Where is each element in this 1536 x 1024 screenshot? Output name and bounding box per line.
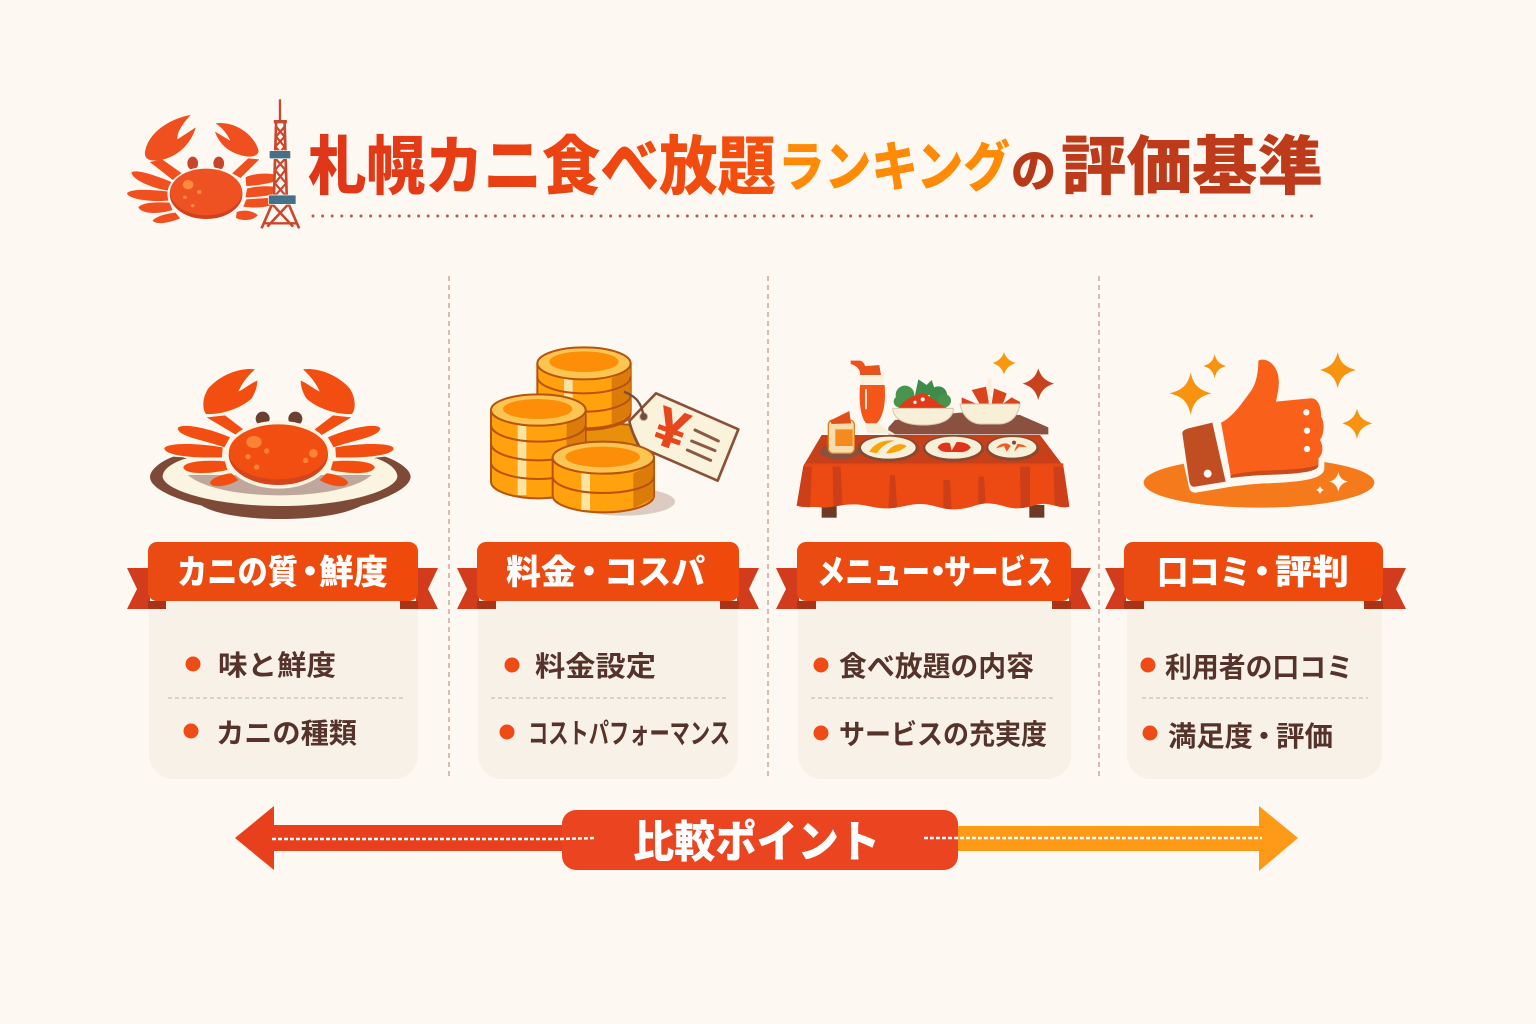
icon: coin stacks with price tag [491, 347, 738, 516]
comparison arrow [235, 806, 1298, 871]
ribbon banner: 評判 [1275, 554, 1349, 592]
list items: 評価 [1276, 721, 1333, 752]
ribbon banner [127, 542, 438, 609]
ribbon banner: ・ [572, 554, 606, 592]
list items: コストパフォーマンス [528, 718, 730, 749]
list items [1140, 652, 1368, 752]
ribbon banner: サービス [944, 553, 1053, 592]
header icon: crab [127, 115, 275, 223]
sauce jar [820, 411, 860, 459]
list items [168, 650, 404, 749]
ribbon banner: 口コミ [1157, 554, 1251, 592]
salad bowl [893, 379, 953, 425]
panel: カニの質・鮮度 [127, 542, 438, 779]
back coin stack [537, 347, 638, 468]
title: の [1011, 145, 1056, 197]
header icon: Sapporo TV tower [262, 99, 299, 228]
panel: メニュー・サービス [776, 542, 1091, 779]
list items [491, 651, 730, 749]
list items: 利用者の口コミ [1165, 652, 1353, 683]
panel: 口コミ・評判 [1105, 542, 1406, 779]
title [308, 131, 1323, 203]
ribbon banner: 鮮度 [319, 554, 388, 592]
price tag [624, 392, 738, 481]
icon: thumbs up [1144, 352, 1374, 508]
ribbon banner: メニュー [817, 554, 930, 592]
food shelf [888, 413, 1048, 434]
front coin stack [553, 442, 654, 512]
list items: カニの種類 [216, 718, 357, 749]
ribbon banner: ・ [921, 554, 955, 592]
list items [811, 651, 1054, 750]
ribbon banner: ・ [293, 554, 327, 592]
icon: crab on plate [150, 369, 411, 519]
price tag: ¥ [647, 394, 697, 463]
title: 評価基準 [1061, 131, 1323, 203]
title: ランキング [778, 137, 1010, 198]
title: 札幌カニ食べ放題 [308, 131, 776, 203]
sparkles [993, 352, 1016, 374]
drink glass [851, 361, 895, 434]
ribbon banner [457, 542, 759, 609]
ribbon banner [1105, 542, 1406, 609]
list items: 味と鮮度 [218, 650, 336, 681]
ribbon banner [776, 542, 1091, 609]
panel: 料金・コスパ [457, 542, 759, 779]
list items: 料金設定 [535, 651, 656, 682]
ribbon banner: ・ [1245, 554, 1279, 592]
ribbon banner: カニの質 [177, 554, 298, 592]
comparison arrow: 比較ポイント [633, 817, 880, 867]
list items: サービスの充実度 [839, 719, 1047, 750]
seafood bowl [960, 378, 1020, 424]
plates [858, 435, 1039, 462]
list items: 食べ放題の内容 [839, 651, 1034, 682]
ribbon banner: コスパ [604, 554, 705, 592]
icon: buffet table [793, 352, 1073, 518]
ribbon banner: 料金 [506, 554, 576, 592]
left coin stack [491, 394, 586, 498]
list items: 満足度 [1168, 721, 1253, 752]
list items: ・ [1250, 721, 1278, 752]
